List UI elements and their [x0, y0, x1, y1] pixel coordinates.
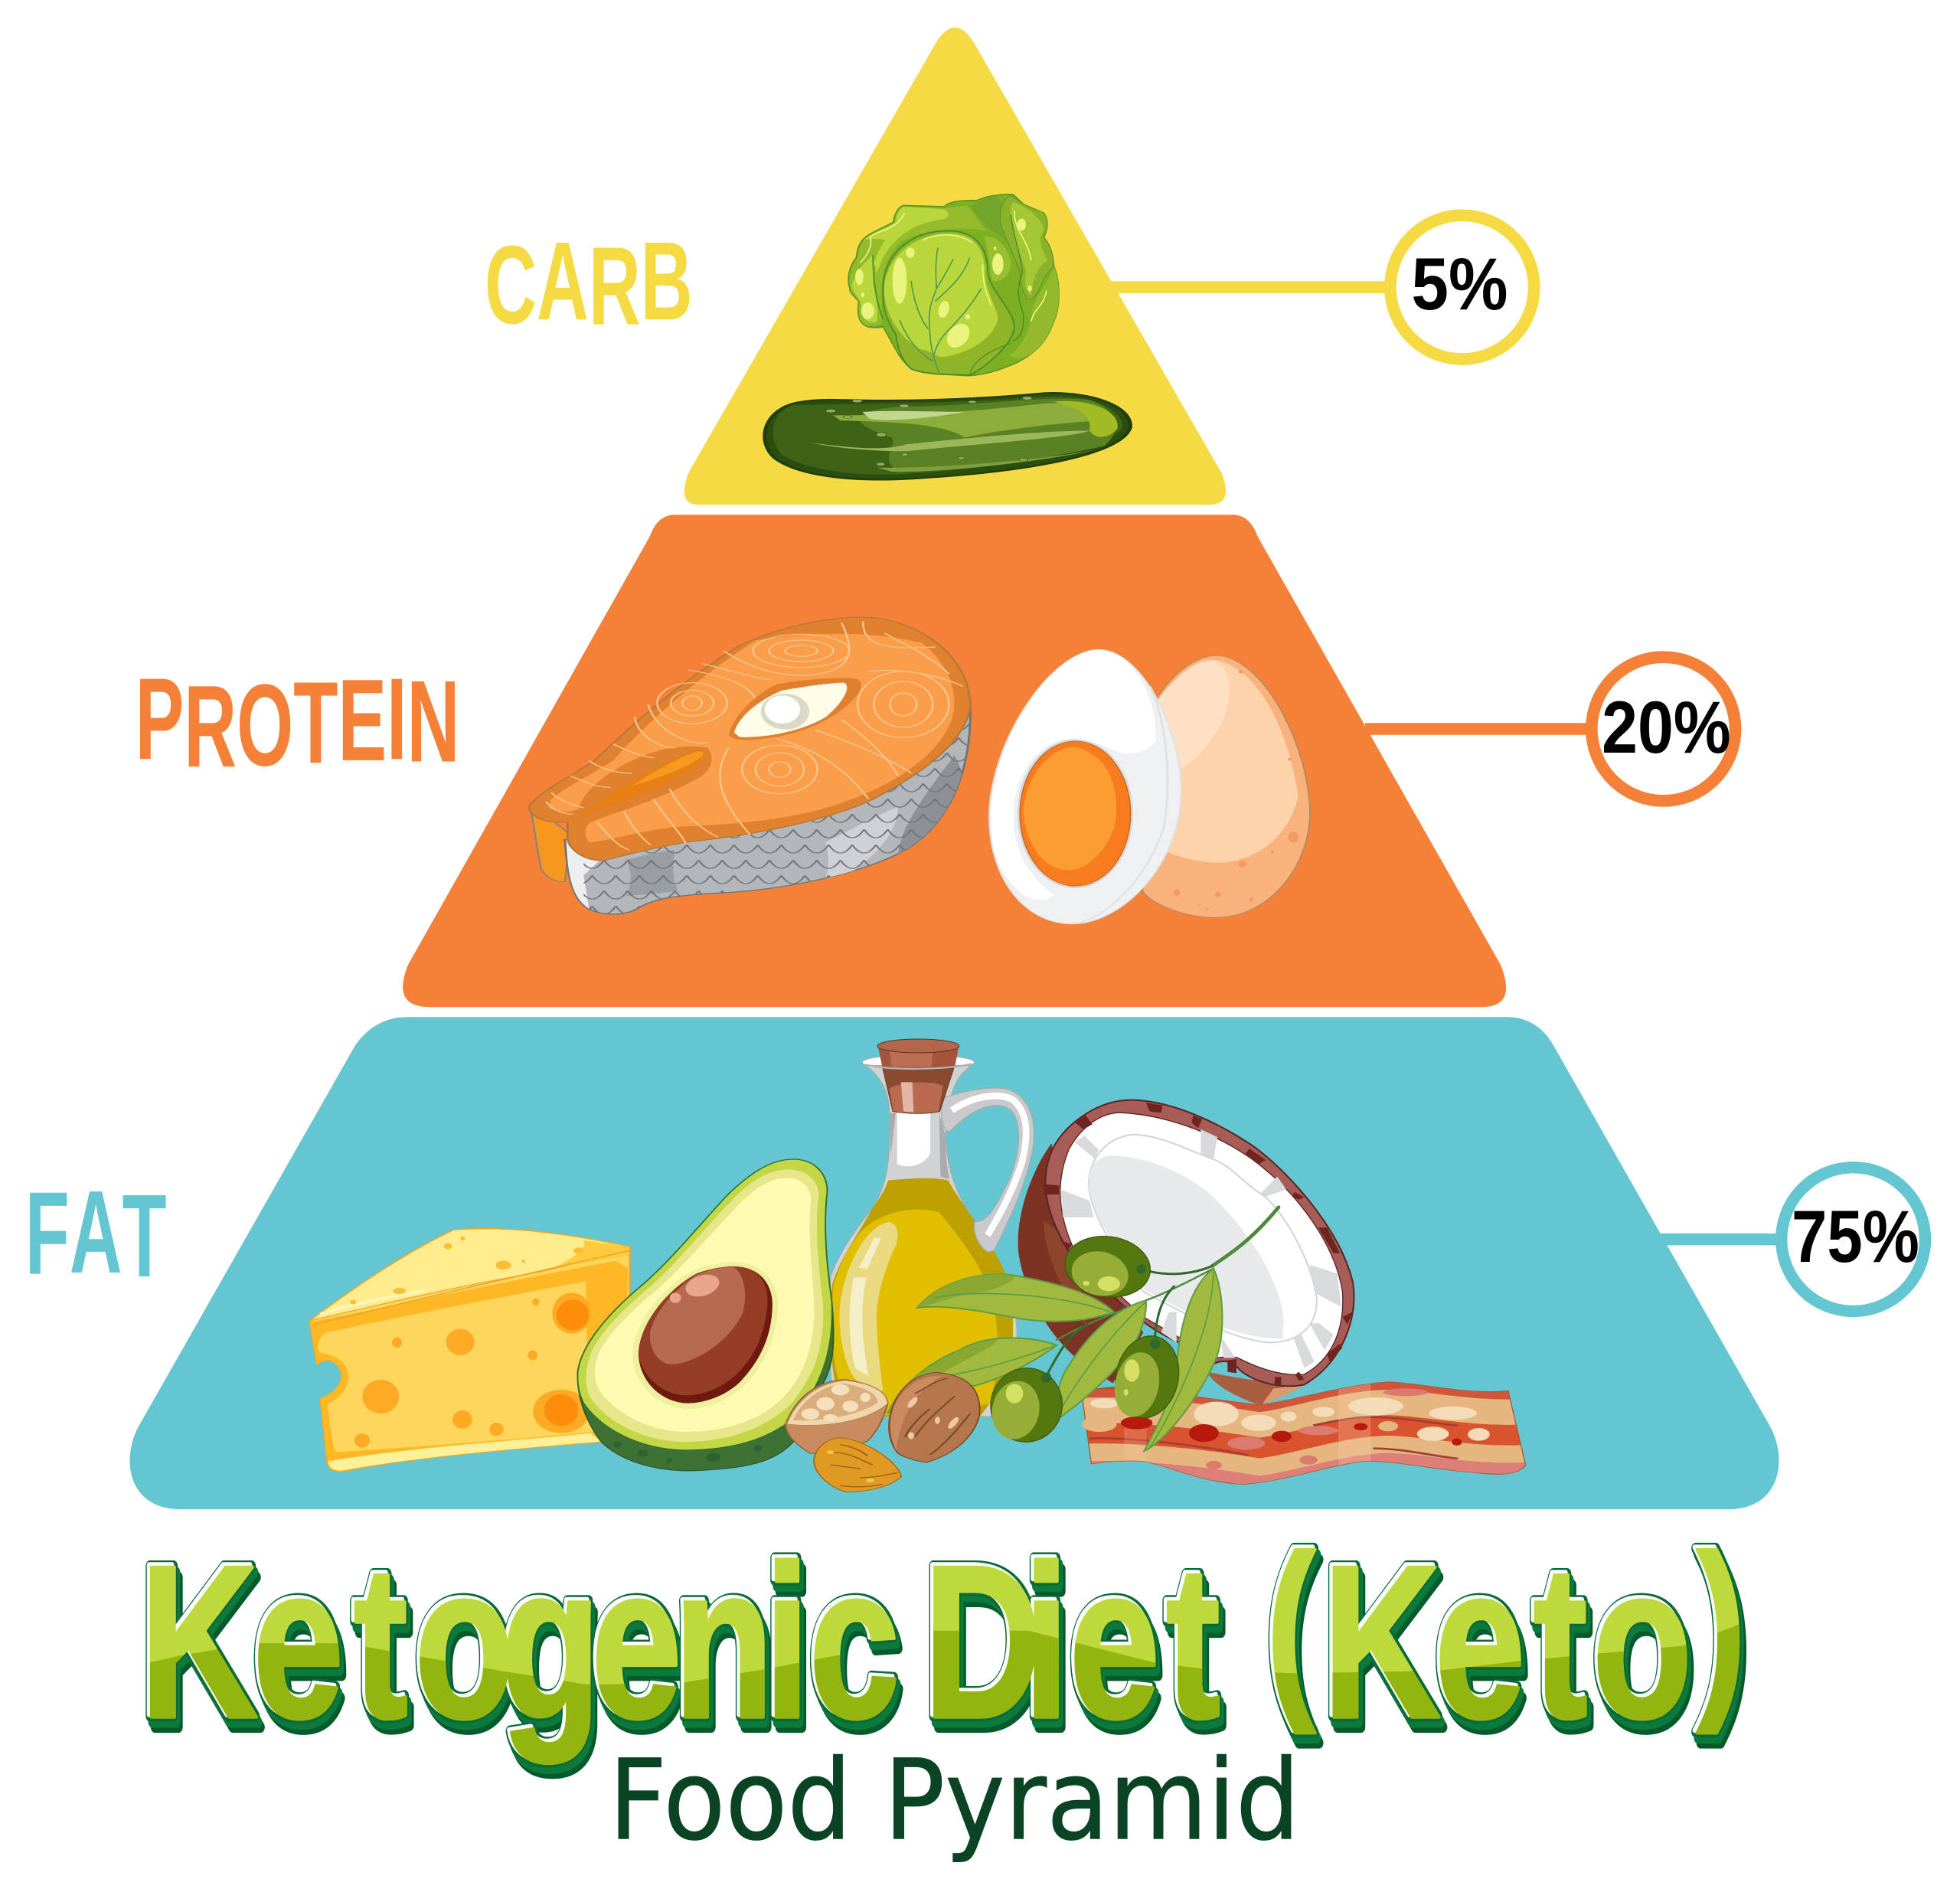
panel: carb tier — [485, 28, 1534, 505]
yellow pyramid top — [684, 28, 1226, 505]
panel: fat tier — [25, 1017, 1926, 1509]
title: Ketogenic Diet (Keto): Ketogenic Diet (Keto) — [140, 1515, 1746, 1764]
icon: coconut half — [1018, 1100, 1354, 1405]
teal pyramid base — [129, 1017, 1779, 1509]
icon: salmon steak — [529, 617, 971, 919]
icon: walnut — [786, 1380, 887, 1453]
protein connector line — [1365, 725, 1597, 733]
protein percentage badge: 20% — [1602, 687, 1731, 769]
carb percentage badge — [1390, 215, 1534, 359]
title: Ketogenic Diet (Keto): Ketogenic Diet (Keto) — [142, 1521, 1747, 1769]
title: Ketogenic Diet (Keto): Ketogenic Diet (Keto) — [140, 1515, 1746, 1764]
icon: bacon strip — [1074, 1378, 1533, 1484]
icon: whole brown egg — [1142, 655, 1310, 917]
carb label: CARB — [485, 218, 693, 348]
protein percentage badge — [1592, 657, 1736, 801]
icon: avocado half — [577, 1159, 834, 1471]
icon: pecan nut — [889, 1372, 980, 1462]
panel: protein tier — [136, 515, 1736, 1007]
title: Ketogenic Diet (Keto): Ketogenic Diet (Keto) — [138, 1513, 1743, 1761]
icon: halved boiled egg — [989, 649, 1181, 924]
protein label: PROTEIN — [136, 654, 459, 792]
fat percentage badge: 75% — [1792, 1196, 1919, 1278]
fat label: FAT — [25, 1166, 167, 1302]
fat connector line — [1659, 1236, 1788, 1243]
carb percentage badge: 5% — [1412, 243, 1508, 325]
orange pyramid middle — [403, 515, 1506, 1007]
icon: cheese wedge — [310, 1229, 629, 1472]
icon: olive oil jug — [829, 1039, 1034, 1417]
title: Ketogenic Diet (Keto): Ketogenic Diet (Keto) — [144, 1525, 1749, 1774]
icon: lettuce — [848, 194, 1059, 376]
subtitle: Food Pyramid: Food Pyramid — [609, 1736, 1300, 1865]
carb connector line — [1102, 283, 1393, 291]
fat percentage badge — [1782, 1168, 1926, 1311]
icon: almond — [814, 1438, 901, 1492]
icon: olive branch — [887, 1207, 1279, 1451]
title: Ketogenic Diet (Keto): Ketogenic Diet (Keto) — [139, 1514, 1745, 1763]
icon: cucumber — [765, 393, 1131, 479]
